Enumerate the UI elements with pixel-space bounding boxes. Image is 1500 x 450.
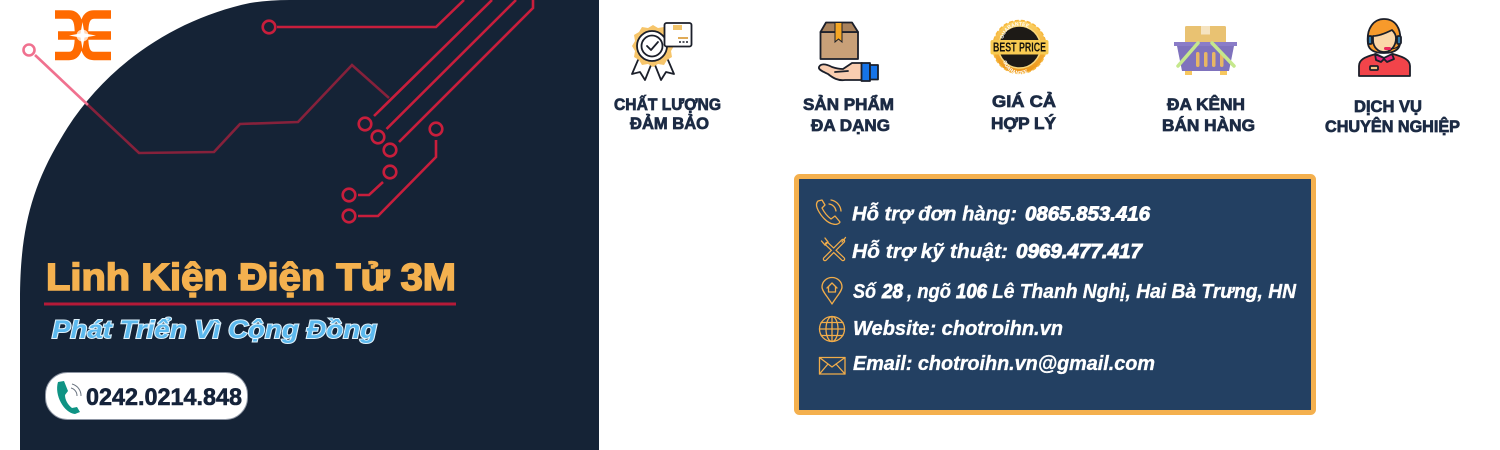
phone pill — [46, 372, 248, 420]
contact line: address: Lê Thanh Nghị, Hai Bà Trưng, HN — [992, 281, 1297, 303]
label: HỢP LÝ — [991, 114, 1056, 133]
contact line: order support: 0865.853.416 — [1025, 204, 1151, 226]
icon: best price badge: GUARANTEE — [1004, 60, 1028, 74]
contact line: address: 28 — [881, 281, 904, 303]
feature: professional service — [1325, 19, 1460, 136]
icon: best price badge: GUARANTEE — [1000, 22, 1030, 38]
label: BÁN HÀNG — [1162, 116, 1255, 135]
feature: diverse products — [803, 22, 894, 135]
subtitle: Phát Triển Vì Cộng Đồng — [52, 316, 377, 344]
label: CHẤT LƯỢNG — [614, 95, 721, 114]
feature: multichannel sales — [1162, 26, 1255, 135]
contact line: address: , ngõ — [906, 281, 951, 303]
label: CHUYÊN NGHIỆP — [1325, 117, 1460, 136]
icon: tools — [822, 238, 846, 259]
circuit traces — [88, 0, 533, 222]
contact line: address: Số — [853, 281, 878, 303]
contact box frame — [796, 176, 1314, 412]
label: GIÁ CẢ — [992, 92, 1056, 111]
logo: 3E mark — [55, 14, 111, 56]
icon: envelope — [820, 358, 845, 374]
icon: shopping basket — [1174, 26, 1237, 75]
label: DỊCH VỤ — [1354, 98, 1422, 116]
panel: dark brand panel — [20, 0, 599, 450]
contact line: address: 106 — [956, 281, 988, 303]
title underline — [44, 302, 456, 306]
contact line: order support — [852, 202, 1151, 226]
icon: support agent — [1359, 19, 1410, 76]
contact line: technical support — [852, 240, 1143, 263]
panel: contact box — [796, 176, 1314, 412]
contact line: address — [853, 281, 1297, 303]
contact line: order support: Hỗ trợ đơn hàng: — [852, 202, 1017, 226]
icon: best price badge: BEST PRICE — [993, 40, 1046, 54]
icon: phone outline — [816, 200, 841, 224]
title: Linh Kiện Điện Tử 3M — [46, 257, 456, 299]
phone number: 0242.0214.848 — [86, 384, 242, 411]
pink trace outside panel — [24, 44, 88, 105]
icon: phone — [57, 381, 81, 414]
label: ĐẢM BẢO — [630, 114, 709, 133]
icon: location pin — [822, 278, 842, 304]
icon: award and package — [632, 23, 692, 80]
icon: best price badge — [990, 20, 1048, 74]
contact line: website: Website: chotroihn.vn — [853, 318, 1063, 340]
contact line: email: Email: chotroihn.vn@gmail.com — [853, 353, 1155, 375]
label: ĐA DẠNG — [811, 117, 890, 135]
feature: fair price — [990, 20, 1056, 133]
label: ĐA KÊNH — [1167, 95, 1245, 114]
feature: quality guaranteed — [614, 23, 721, 133]
icon: globe — [820, 316, 844, 342]
icon: box over hand — [819, 22, 878, 81]
label: SẢN PHẨM — [803, 95, 894, 114]
panel background — [20, 0, 599, 450]
contact line: technical support: Hỗ trợ kỹ thuật: — [852, 240, 1008, 263]
contact line: technical support: 0969.477.417 — [1016, 241, 1143, 263]
